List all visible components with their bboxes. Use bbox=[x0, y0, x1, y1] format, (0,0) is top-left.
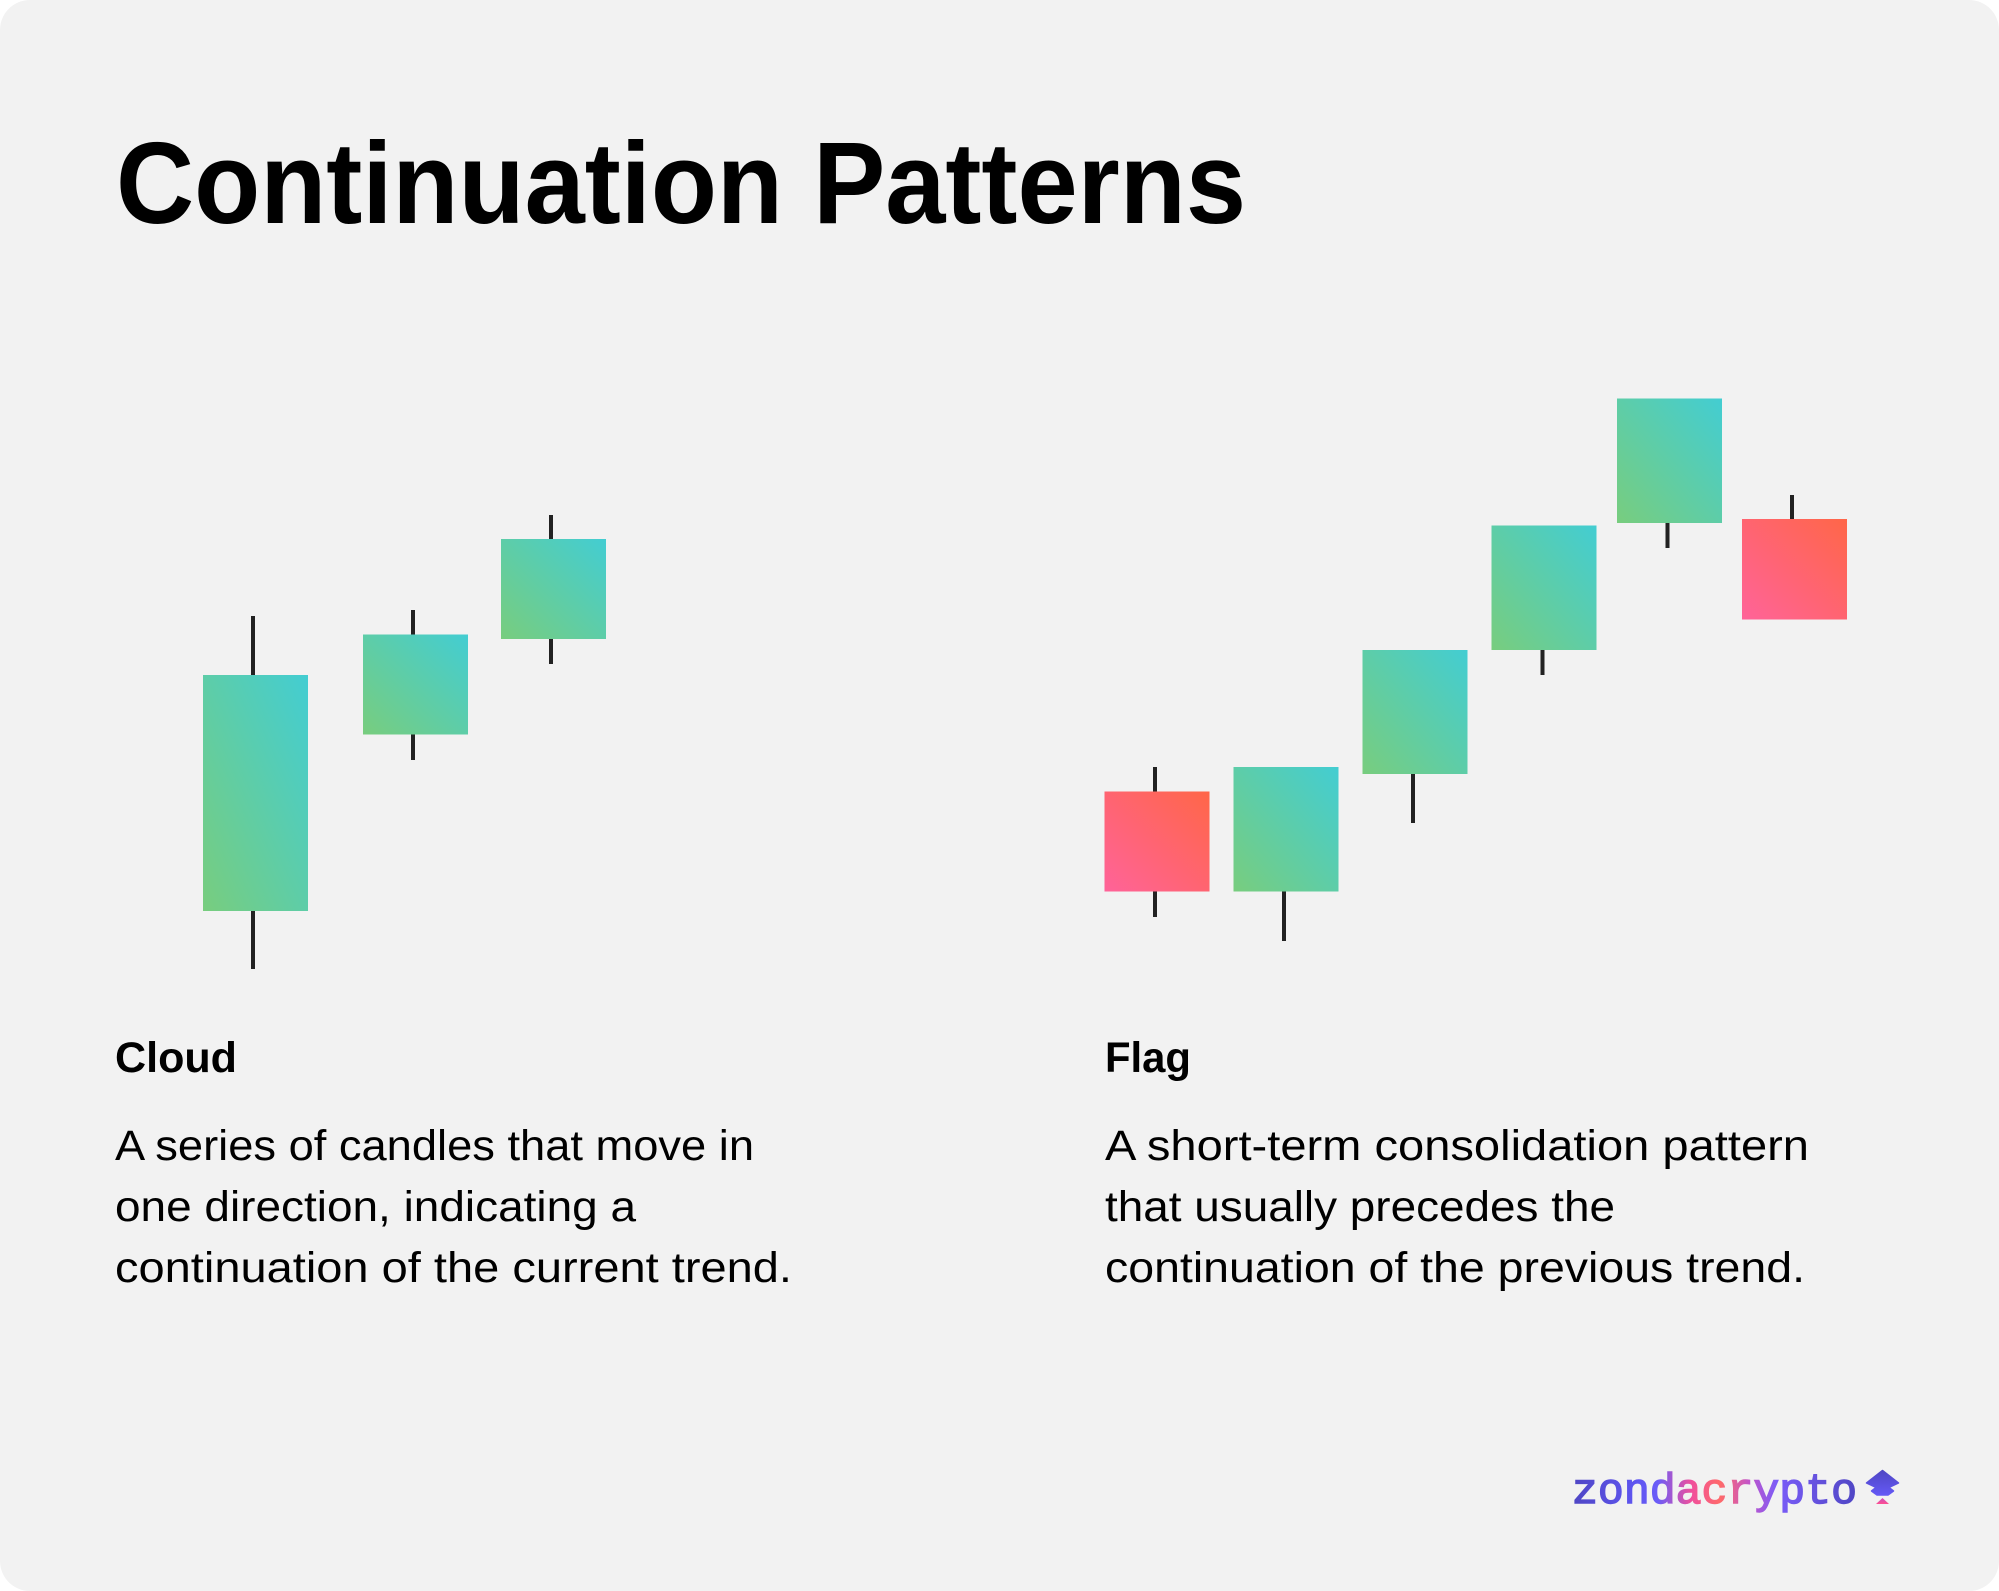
text block: Flag description: A short-term consolidation pattern bbox=[1105, 1122, 1809, 1170]
heading: Cloud: Cloud bbox=[115, 1034, 237, 1082]
candle: flag 2 bbox=[1234, 767, 1338, 941]
candle: cloud 1 bbox=[203, 616, 308, 969]
candle: flag 3 bbox=[1362, 650, 1468, 823]
text block: Cloud description bbox=[115, 1122, 792, 1292]
title: Continuation Patterns bbox=[116, 118, 1246, 248]
candle: cloud 3 bbox=[501, 515, 606, 664]
text block: Cloud description: one direction, indicating a bbox=[115, 1183, 636, 1231]
logo: zondacrypto bbox=[1572, 1467, 1898, 1516]
candle: cloud 2 bbox=[363, 610, 468, 760]
chart: flag candlesticks bbox=[1104, 398, 1847, 941]
text block: Cloud description: A series of candles that move in bbox=[115, 1122, 754, 1170]
chart: cloud candlesticks bbox=[203, 515, 606, 969]
icon: logo mark bbox=[1866, 1470, 1898, 1504]
text block: Flag description: continuation of the previous trend. bbox=[1105, 1244, 1805, 1292]
text block: Flag description bbox=[1105, 1122, 1809, 1292]
logo wordmark: zondacrypto bbox=[1572, 1467, 1857, 1516]
text block: Flag description: that usually precedes the bbox=[1105, 1183, 1615, 1231]
candle: flag 5 bbox=[1617, 398, 1722, 548]
candle: flag 4 bbox=[1492, 526, 1596, 675]
candle: flag 1 (red) bbox=[1104, 767, 1210, 917]
text block: Cloud description: continuation of the current trend. bbox=[115, 1244, 792, 1292]
heading: Flag: Flag bbox=[1105, 1034, 1191, 1082]
candle: flag 6 (red) bbox=[1742, 495, 1847, 620]
